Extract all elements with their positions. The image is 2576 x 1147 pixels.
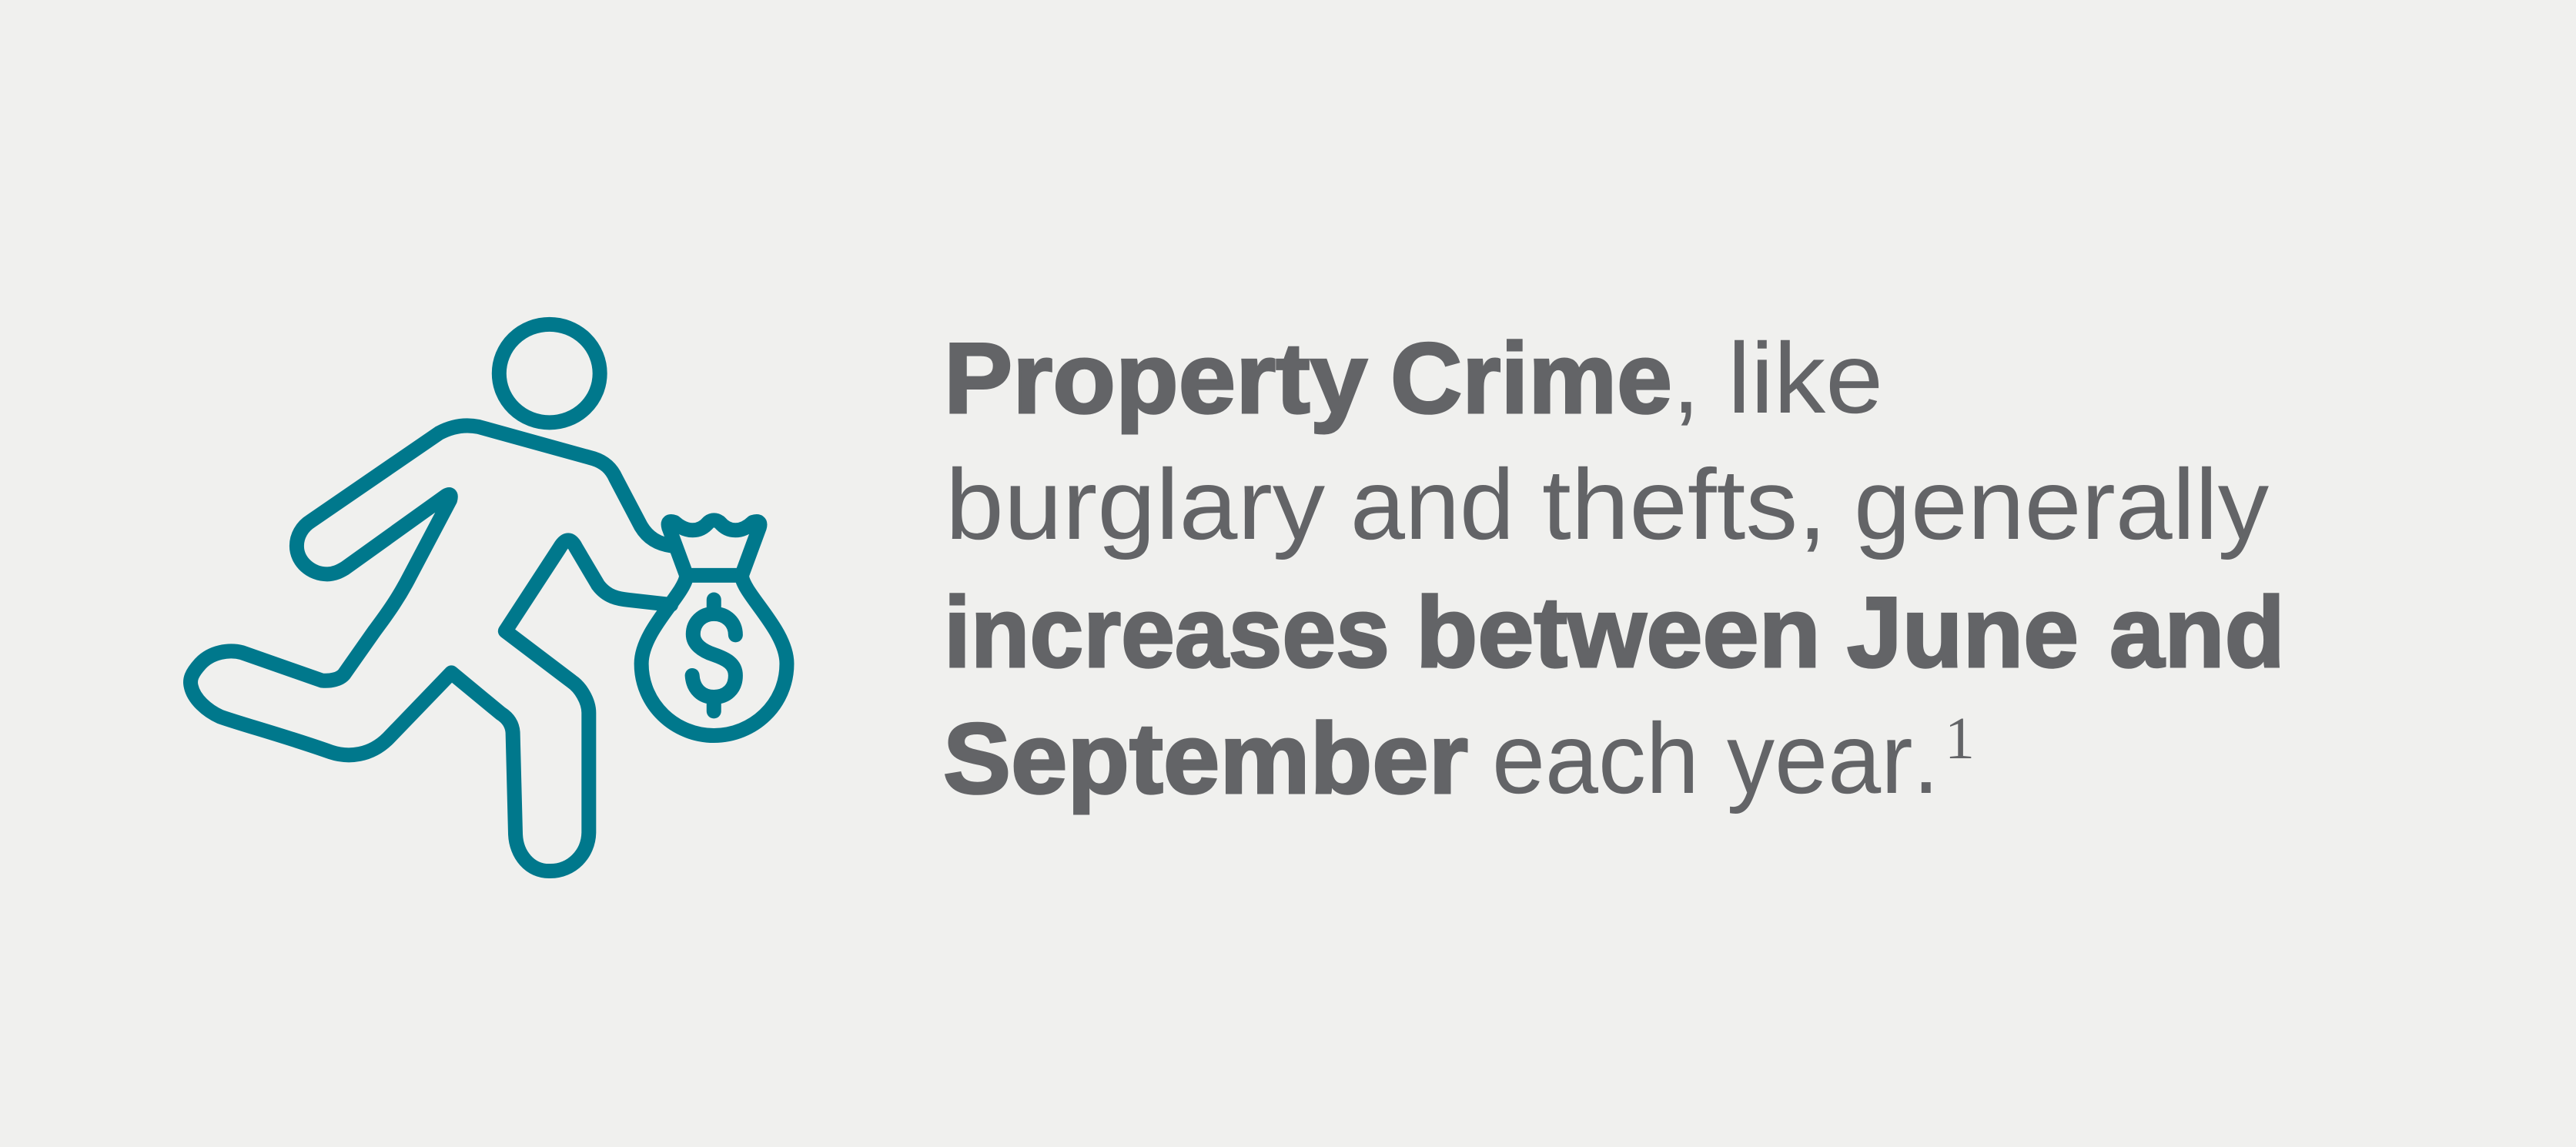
line 3: increases bbox=[944, 576, 1390, 688]
line 2: burglary bbox=[945, 448, 1325, 560]
money bag bbox=[641, 520, 787, 736]
bag neck bbox=[668, 520, 760, 575]
line 2: thefts, bbox=[1542, 448, 1827, 560]
line 1 bbox=[944, 322, 1883, 434]
line 4: 1 bbox=[1945, 704, 1975, 771]
line 2 bbox=[945, 448, 2269, 560]
text block: property crime statement bbox=[943, 322, 2285, 814]
thief head bbox=[499, 324, 600, 423]
line 1: like bbox=[1728, 322, 1883, 434]
line 1: Property bbox=[944, 322, 1367, 434]
line 4: each bbox=[1492, 702, 1699, 814]
line 4 bbox=[943, 702, 1975, 814]
line 1: Crime bbox=[1390, 322, 1672, 434]
thief body bbox=[190, 426, 672, 871]
icon: running thief with money bag bbox=[190, 324, 787, 871]
line 3: June bbox=[1847, 576, 2079, 688]
bag body bbox=[641, 576, 787, 736]
line 1: , bbox=[1672, 322, 1700, 434]
line 4: year. bbox=[1727, 702, 1939, 814]
line 3: between bbox=[1416, 576, 1821, 688]
line 2: and bbox=[1350, 448, 1514, 560]
line 3: and bbox=[2109, 576, 2285, 688]
dollar sign bbox=[692, 600, 735, 711]
line 3 bbox=[944, 576, 2285, 688]
line 2: generally bbox=[1854, 448, 2269, 560]
line 4: September bbox=[943, 702, 1468, 814]
